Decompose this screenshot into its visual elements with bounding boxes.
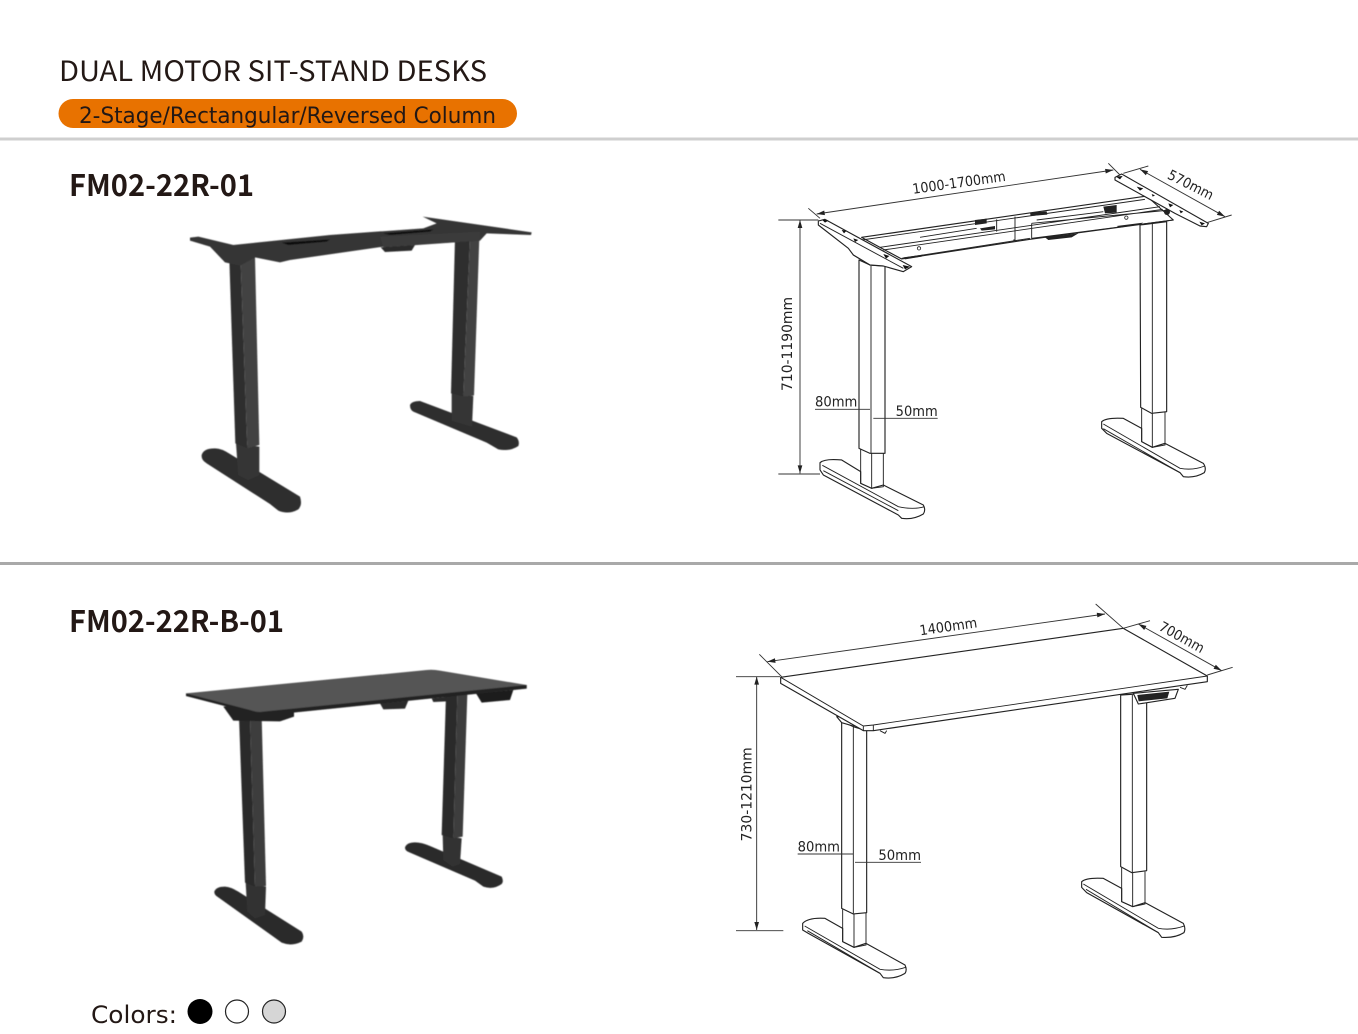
- model heading: FM02-22R-01: FM02-22R-01: [69, 161, 254, 205]
- title: DUAL MOTOR SIT-STAND DESKS: [59, 50, 487, 90]
- dimension: 50mm: [873, 404, 938, 420]
- plates: [818, 219, 912, 272]
- dimension: depth: 570mm: [1165, 167, 1216, 204]
- dimension: 50mm: 50mm: [878, 848, 921, 864]
- dimension: height: [778, 220, 820, 474]
- line drawing: desk frame with dimensions: [778, 163, 1232, 519]
- dimension: 80mm: 80mm: [815, 395, 857, 411]
- dimension: width: 1400mm: [919, 615, 978, 639]
- dimension: 80mm: 80mm: [798, 840, 840, 856]
- colour options: [91, 999, 286, 1029]
- control panel: [1133, 689, 1178, 704]
- right leg: [1082, 878, 1185, 937]
- dimension: depth: [1123, 166, 1232, 223]
- left leg: [803, 918, 906, 978]
- right leg: [1102, 418, 1205, 477]
- subtitle pill: 2-Stage/Rectangular/Reversed Column: [79, 104, 496, 129]
- beams: [862, 196, 1173, 259]
- photo: desk frame: [190, 217, 532, 513]
- dimension: height: 730-1210mm: [739, 747, 755, 841]
- dimension: width: 1000-1700mm: [911, 169, 1007, 198]
- dimension: width: [759, 604, 1123, 677]
- desktop: [781, 628, 1207, 731]
- dimension: depth: [1123, 619, 1233, 675]
- under-top parts: [837, 717, 857, 726]
- dimension: 50mm: [855, 848, 921, 864]
- photo: desk with top: [186, 670, 527, 944]
- dimension: width: [808, 163, 1120, 218]
- model heading: FM02-22R-B-01: FM02-22R-B-01: [69, 597, 284, 641]
- colour options: Colors:: [91, 1001, 177, 1029]
- dimension: height: [736, 677, 783, 931]
- left leg: [820, 460, 925, 519]
- dimension: 50mm: 50mm: [896, 404, 938, 420]
- dimension: height: 710-1190mm: [780, 297, 796, 391]
- line drawing: desk with top and dimensions: [736, 604, 1233, 978]
- dimension: depth: 700mm: [1156, 619, 1207, 657]
